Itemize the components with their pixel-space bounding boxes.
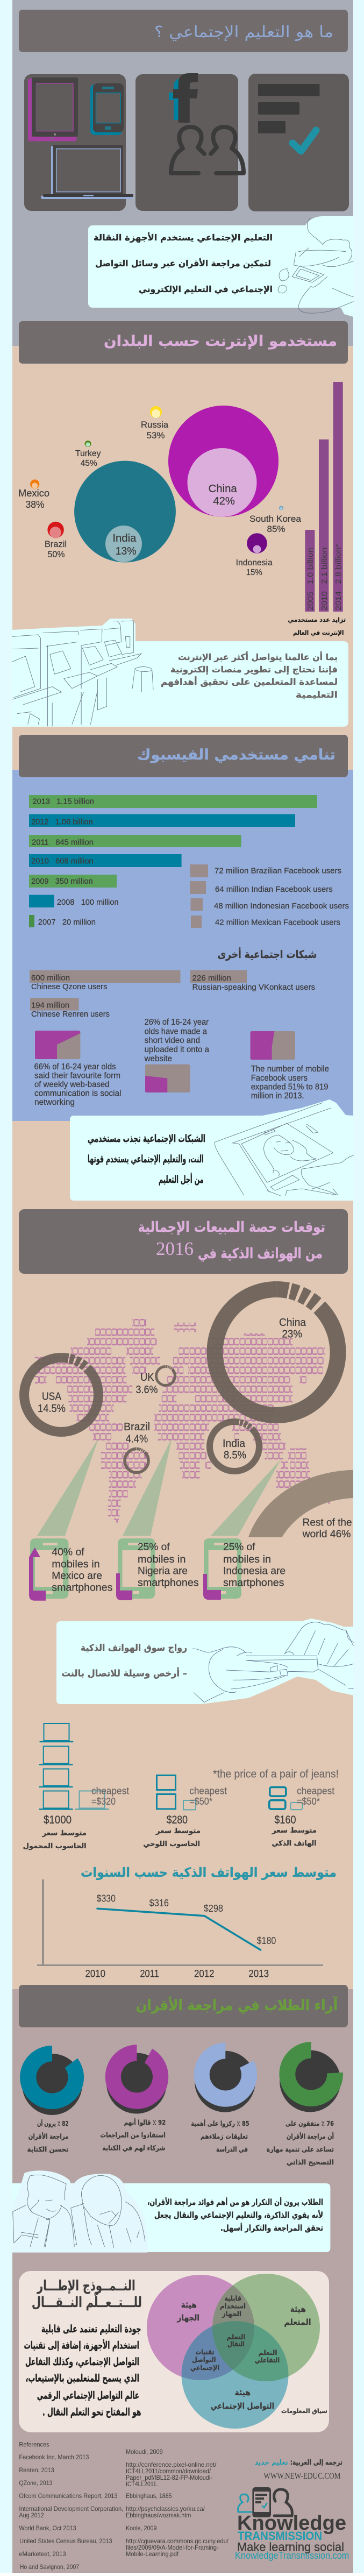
heading: smartphone sales forecast: [19, 1209, 348, 1274]
heading: what is social learning: [19, 10, 348, 52]
illustration: tablet video: [215, 1103, 353, 1196]
chart: laptop price: cheapest: [91, 1786, 129, 1797]
venn labels: الإجتماعي: [190, 2364, 219, 2372]
icon: two people: [171, 127, 244, 173]
chart: price line: 2013: [248, 1969, 269, 1980]
beams: country pointers: [37, 1438, 281, 1536]
text: references column two: Mobile-Learning.pdf: [126, 2550, 179, 2558]
logo: Knowledge Transmission: Knowledge: [237, 2512, 346, 2535]
chart: internet users bubbles: [18, 406, 302, 577]
bubble: Mexico: 38%: [26, 499, 44, 510]
chart: tablet price: $280: [167, 1814, 188, 1826]
callout: smartphone market: [56, 1619, 353, 1704]
text: references column two: http://cguevara.commons.gc.cuny.edu/: [126, 2537, 229, 2545]
venn labels: قابلية: [225, 2294, 241, 2302]
bubble: Turkey: [75, 441, 101, 468]
heading: facebook growth: [19, 735, 348, 777]
heading: smartphone sales forecast: من الهواتف الذكية في: [198, 1246, 323, 1262]
chart: other networks bars: Russian-speaking VKonkact users: [192, 983, 315, 992]
stat: 66 percent social networking: of weekly web-based: [34, 1080, 110, 1089]
icon: smartphone: [90, 83, 124, 135]
illustration: student writing: [278, 218, 353, 313]
venn labels: التعلم: [226, 2333, 245, 2341]
text: framework description: استخدام الأجهزة، إضافة إلى تقنيات: [24, 2339, 139, 2351]
bubble: Brazil: 50%: [47, 550, 65, 559]
chart: facebook users per year: 2008 100 million: [57, 898, 119, 907]
callout text: [94, 232, 273, 295]
callout: repetition benefit: [12, 2170, 330, 2253]
venn labels: سياق المعلومات: [281, 2407, 327, 2415]
callout text: لأنه يقوي الذاكرة، والتعليم الإجتماعي والنقال يجعل: [154, 2210, 323, 2220]
heading: students views on peer review: آراء الطلاب في مراجعة الأقران: [136, 1996, 338, 2014]
chart: price line: 2012: [194, 1969, 214, 1980]
icon: check mark: [292, 130, 316, 151]
bubble: Turkey: Turkey: [75, 449, 101, 458]
heading: framework title: للـــتــعــلّم النــقـــال: [32, 2291, 142, 2311]
stat: 26 percent short video: website: [144, 1054, 172, 1063]
chart: facebook users per year: 2010 608 million: [31, 856, 94, 865]
bubble: South Korea: [249, 506, 302, 534]
bubble: Russia: Russia: [141, 420, 169, 430]
text: references column two: Paper_pdf/IBL12-82-FP-Moloudi-: [126, 2474, 212, 2481]
chart: tablet price: متوسط سعر: [155, 1827, 201, 1835]
text: references column two: Moloudi, 2009: [126, 2448, 163, 2456]
venn labels: المتعلم: [284, 2317, 311, 2327]
bubble: China: 42%: [213, 495, 235, 507]
callout text: التعليم الإجتماعي يستخدم الأجهزة النقالة: [94, 232, 273, 243]
callout text: بما أن عالمنا يتواصل أكثر عبر الإنترنت: [178, 651, 338, 662]
phone stat: Nigeria: 25% of: [138, 1542, 170, 1553]
venn labels: استخدام: [220, 2302, 246, 2311]
ring: USA: [24, 1358, 98, 1432]
bubble: China: [168, 406, 279, 517]
chart: tablet price: الحاسوب اللوحي: [143, 1840, 200, 1848]
callout text: النت، والتعليم الإجتماعي يستخدم قوتها: [88, 1153, 204, 1165]
donut: 76 percent: تساعد على تنمية مهارة: [267, 2145, 334, 2153]
callout: online world: [12, 619, 348, 727]
donut: 85 percent: 85 ٪ ركزوا على أهمية: [191, 2119, 249, 2127]
donut: 76 percent: التصحيح الذاتي: [287, 2158, 334, 2166]
callout text: – أرخص وسيلة للاتصال بالنت: [61, 1667, 187, 1679]
donut: 82 percent: تحسن الكتابة: [27, 2145, 68, 2153]
phone stat: Nigeria: [116, 1538, 199, 1600]
chart: smartphone price: الهاتف الذكي: [272, 1840, 316, 1848]
donut: 85 percent: [191, 2042, 257, 2153]
ring: USA: USA: [42, 1391, 62, 1403]
donut: 82 percent: [20, 2046, 84, 2153]
donut: 76 percent: 76 ٪ متفقون على: [286, 2119, 334, 2127]
heading: students views on peer review: [19, 1985, 348, 2027]
venn labels: الجهاز: [222, 2310, 241, 2318]
text: references column two: files/2009/09/A-Model-for-Framing-: [126, 2544, 219, 2551]
text: framework description: [24, 2323, 141, 2418]
panel: social network card: [135, 73, 244, 211]
ring: China: 23%: [282, 1329, 302, 1340]
text: references column one: Facebook Inc, March 2013: [19, 2453, 89, 2461]
caption: growth of internet users: تزايد عدد مستخدمي: [288, 616, 346, 623]
heading: other social networks: شبكات اجتماعية أخرى: [218, 947, 317, 961]
chart: facebook users per country: 42 million Mexican Facebook users: [215, 918, 340, 927]
text: references column one: [19, 2440, 123, 2571]
bubble: Russia: 53%: [146, 430, 165, 441]
logo: Knowledge Transmission: Make learning social: [237, 2540, 344, 2554]
ring: rest of the world: Rest of the: [303, 1517, 352, 1529]
callout: social networks attract users: [70, 1099, 353, 1201]
illustration: computer stations: [12, 621, 153, 726]
donut: 92 percent: [100, 2045, 168, 2152]
icon: facebook f: [169, 73, 198, 123]
chart: smartphone price: [269, 1786, 334, 1848]
bubble: Brazil: [45, 522, 67, 559]
donut: 92 percent: 92 ٪ قالوا أنهم: [124, 2118, 166, 2126]
chart: price line: [37, 1879, 323, 1980]
ring: India: 8.5%: [224, 1450, 246, 1461]
ring: Brazil: [124, 1421, 150, 1473]
bubble: Indonesia: [236, 533, 273, 577]
phone stat: Nigeria: mobiles in: [138, 1554, 185, 1565]
venn diagram: [147, 2274, 327, 2429]
venn labels: الجهاز: [177, 2313, 199, 2323]
phone stat: Mexico: Mexico are: [52, 1571, 102, 1582]
chart: other networks bars: [30, 970, 315, 1019]
callout text: تحقق المراجعة والتكرار أسهل.: [220, 2223, 323, 2233]
chart: world internet users bars: 2005 1.0 billion: [306, 548, 315, 611]
text: references column two: [126, 2448, 229, 2558]
chart: world internet users bars: 2014 2.8 billion*: [334, 544, 343, 611]
ring: Brazil: Brazil: [124, 1421, 150, 1433]
chart: price line: 2011: [140, 1969, 159, 1980]
stat: mobile facebook users: million in 2013.: [251, 1091, 304, 1101]
ring: China: [215, 1289, 338, 1415]
chart: facebook users per year: 2009 350 million: [31, 877, 93, 886]
text: framework description: جودة التعليم تعتمد على قابلية: [41, 2323, 141, 2335]
callout text: [147, 2197, 323, 2233]
chart: facebook users per year: 2013 1.15 billion: [32, 797, 94, 806]
chart: laptop price: الحاسوب المحمول: [23, 1842, 87, 1850]
ring: India: [210, 1422, 259, 1471]
venn labels: التواصل: [192, 2355, 216, 2364]
callout text: فإننا نحتاج إلى تطوير منصات إلكترونية: [170, 664, 338, 675]
chart: tablet price: cheapest: [189, 1786, 227, 1797]
donut: 82 percent: 82 ٪ يرون أن: [37, 2119, 68, 2127]
heading: what is social learning: ما هو التعليم الإجتماعي ؟: [154, 23, 333, 41]
donut: 76 percent: أن مراجعة الأقران: [287, 2132, 334, 2140]
chart: smartphone price: $160: [274, 1814, 296, 1826]
ring: UK: 3.6%: [135, 1384, 158, 1396]
chart: price line: 2010: [85, 1969, 105, 1980]
bubble: India: India: [112, 533, 137, 544]
logo: Knowledge Transmission: [235, 2487, 349, 2561]
text: framework description: عالم التواصل الإجتماعي الرقمي: [37, 2389, 139, 2401]
stat: mobile facebook users: expanded 51% to 819: [251, 1083, 328, 1092]
text: references column one: eMarketeet, 2013: [19, 2550, 66, 2558]
venn labels: التفاعلي: [255, 2356, 280, 2364]
phone stat: Nigeria: smartphones: [138, 1578, 199, 1589]
chart: tablet price: =$50*: [189, 1796, 212, 1807]
callout text: الشبكات الإجتماعية تجذب مستخدمي: [88, 1133, 205, 1145]
chart: laptop price: =$320: [91, 1796, 116, 1807]
ring: rest of the world: [248, 1470, 353, 1540]
chart: other networks bars: 600 million: [31, 974, 70, 982]
donut: 85 percent: في الدراسة: [216, 2145, 248, 2153]
callout text: التعليمية: [296, 690, 338, 700]
venn labels: النقال: [227, 2340, 245, 2348]
chart: price line: $330: [97, 1893, 116, 1904]
phone stat: Indonesia: 25% of: [223, 1542, 255, 1553]
illustration: two students: [13, 2175, 145, 2247]
chart: other networks bars: 226 million: [192, 974, 231, 983]
text: framework description: هو المفتاح نحو التعلم النقال .: [42, 2406, 141, 2418]
ring: UK: UK: [140, 1372, 154, 1383]
text: references column two: Koole, 2009: [126, 2524, 157, 2532]
bubble: Mexico: [18, 479, 49, 510]
callout text: لتمكين مراجعة الأقران عبر وسائل التواصل: [95, 258, 271, 268]
phone stat: Nigeria: Nigeria are: [138, 1566, 188, 1577]
stat: mobile facebook users: [251, 1031, 329, 1101]
credit: Arabic translation: [255, 2459, 342, 2481]
stat: 66 percent social networking: said their favourite form: [34, 1071, 120, 1081]
heading: internet users by country: مستخدمو الإنترنت حسب البلدان: [104, 333, 337, 350]
text: references column two: http://conference.pixel-online.net/: [126, 2461, 217, 2468]
bubble: China: China: [209, 483, 238, 495]
stat: 66 percent social networking: [34, 1031, 122, 1107]
icon: laptop: [41, 145, 133, 199]
heading: smartphone sales forecast: 2016: [156, 1238, 194, 1259]
text: references column one: World Bank, Oct 2013: [19, 2524, 76, 2532]
chart: smartphone price: =$50*: [297, 1796, 320, 1807]
chart: smartphone price: cheapest: [297, 1786, 334, 1797]
text: references column one: Aug 2012: [19, 2511, 44, 2519]
text: references column two: Ebbinghaus/wozniak.htm: [126, 2511, 191, 2519]
text: references column one: References: [19, 2440, 49, 2448]
donut: 76 percent: [267, 2042, 343, 2166]
callout text: الإجتماعي في التعليم الإلكتروني: [139, 284, 273, 295]
chart: facebook users per year: 2011 845 million: [32, 838, 94, 847]
ring: India: India: [223, 1438, 246, 1450]
text: framework description: الذي يسمح للمتعلمين بالإستيعاب،: [26, 2373, 139, 2385]
text: references column one: United States Census Bureau, 2013: [19, 2537, 112, 2545]
callout text: [61, 1643, 187, 1679]
chart: world internet users bars: [305, 382, 343, 612]
bubble: India: 13%: [116, 545, 137, 557]
heading: average smartphone price: متوسط سعر الهواتف الذكية حسب السنوات: [81, 1865, 337, 1880]
chart: price line: $298: [204, 1903, 223, 1914]
bubble: India: [74, 461, 176, 562]
panel: review card: [248, 74, 349, 211]
chart: laptop price: $1000: [44, 1814, 72, 1826]
phone stat: Mexico: smartphones: [52, 1582, 112, 1594]
text: references column one: International Development Corporation,: [19, 2505, 123, 2513]
chart: other networks bars: Chinese Renren users: [31, 1010, 110, 1019]
illustration: hands with phone: [192, 1622, 353, 1702]
stat: 66 percent social networking: networking: [34, 1098, 75, 1107]
chart: facebook users per country: 64 million Indian Facebook users: [215, 885, 333, 894]
bubble: Mexico: Mexico: [18, 488, 49, 499]
venn labels: تقنيات: [196, 2348, 214, 2356]
venn labels: هيئة: [234, 2388, 251, 2397]
logo: Knowledge Transmission: TRANSMISSION: [238, 2529, 322, 2543]
chart: facebook users per year: [29, 795, 317, 927]
credit: Arabic translation: ترجمه إلى العربية:: [290, 2459, 342, 2467]
ring: USA: 14.5%: [38, 1403, 66, 1415]
callout text: من أجل التعليم: [159, 1173, 204, 1186]
chart: facebook users per country: 48 million Indonesian Facebook users: [214, 902, 349, 911]
venn labels: [177, 2294, 327, 2415]
chart: other networks bars: Chinese Qzone users: [31, 982, 108, 991]
caption: growth of internet users: [288, 616, 346, 636]
phone stat: Indonesia: Indonesia are: [223, 1566, 286, 1577]
phone stat: Indonesia: smartphones: [223, 1578, 284, 1589]
icons: laptops: [44, 1723, 69, 1808]
stat: 66 percent social networking: communication is social: [34, 1089, 122, 1098]
stat: mobile facebook users: The number of mobile: [251, 1065, 329, 1074]
text: references column one: QZone, 2013: [19, 2479, 53, 2487]
chart: other networks bars: 194 million: [31, 1001, 69, 1010]
venn labels: التواصل الإجتماعي: [211, 2401, 274, 2411]
stat: 66 percent social networking: 66% of 16-24 year olds: [34, 1062, 116, 1071]
caption: growth of internet users: الإنترنت في العالم: [293, 629, 344, 636]
text: references column two: http://psychclassics.yorku.ca/: [126, 2505, 205, 2513]
credit: Arabic translation: تعليم جديد: [255, 2459, 288, 2467]
donut: 92 percent: شركاء لهم في الكتابة: [102, 2144, 165, 2152]
map: world of phone glyphs: [35, 1318, 332, 1522]
chart: price line: $180: [257, 1935, 276, 1946]
heading: internet users by country: [19, 321, 348, 364]
bubble: Indonesia: Indonesia: [236, 558, 273, 567]
text: framework description: التواصل الإجتماعي، وكذلك التفاعل: [25, 2356, 139, 2368]
callout: social learning definition: [88, 216, 353, 317]
callout text: رواج سوق الهواتف الذكية: [81, 1643, 187, 1654]
panel: devices card: [24, 74, 133, 211]
text: references column one: Renren, 2013: [19, 2466, 54, 2474]
chart: tablet price: [143, 1775, 227, 1848]
callout text: [161, 651, 338, 700]
bubble: Russia: [141, 406, 169, 441]
donut: 85 percent: تعليقات زملاءهم: [201, 2132, 248, 2140]
phone stat: Indonesia: mobiles in: [223, 1554, 271, 1565]
ring: China: China: [279, 1317, 306, 1329]
donut: 82 percent: مراجعة الأقران: [28, 2132, 68, 2140]
stat: mobile facebook users: Facebook users: [251, 1074, 308, 1083]
bubble: Brazil: Brazil: [45, 540, 67, 549]
text: references column two: Ebbinghaus, 1885: [126, 2492, 172, 2500]
stat: 26 percent short video: [144, 1018, 209, 1092]
venn labels: التعلم: [259, 2348, 277, 2357]
venn labels: هيئة: [181, 2300, 197, 2310]
chart: facebook users per year: 2007 20 million: [38, 918, 96, 927]
chart: facebook users per country: 72 million Brazilian Facebook users: [215, 867, 341, 876]
heading: framework title: النــمــوذج الإطـــار: [37, 2278, 135, 2294]
chart: facebook users per year: 2012 1.06 billion: [31, 818, 93, 826]
heading: facebook growth: تنامي مستخدمي الفيسبوك: [137, 747, 336, 763]
phone stat: Mexico: mobiles in: [52, 1559, 100, 1570]
bubble: South Korea: South Korea: [249, 514, 302, 524]
chart: world internet users bars: 2010 2.1 billion: [320, 547, 329, 611]
callout text: لمساعدة المتعلمين على تحقيق أهدافهم: [161, 676, 338, 687]
phone stat: Indonesia: [203, 1538, 286, 1600]
heading: framework title: [32, 2278, 142, 2311]
credit: Arabic translation: WWW.NEW-EDUC.COM: [263, 2472, 340, 2481]
text: references column two: ICT4LL2011/common/download/: [126, 2467, 211, 2475]
icon: text lines: [258, 84, 319, 133]
logo: Knowledge Transmission: KnowledgeTransmission.com: [235, 2550, 349, 2561]
chart: smartphone price: متوسط سعر: [272, 1827, 317, 1835]
bubble: South Korea: 85%: [267, 524, 286, 534]
chart: facebook users per country: [190, 864, 349, 928]
heading: smartphone sales forecast: توقعات حصة المبيعات الإجمالية: [138, 1219, 325, 1236]
stat: 26 percent short video: short video and: [145, 1036, 200, 1045]
bubble: Turkey: 45%: [81, 459, 97, 468]
venn labels: هيئة: [290, 2304, 306, 2314]
icon: tablet: [28, 77, 78, 141]
donut: 92 percent: استفادوا من المراجعات: [100, 2131, 166, 2139]
text: references column one: Ho and Savignon, 2007: [20, 2563, 79, 2571]
chart: laptop price: متوسط سعر: [42, 1829, 87, 1837]
chart: price line: $316: [149, 1898, 169, 1908]
phone stat: Mexico: [29, 1538, 112, 1601]
note: price of jeans: *the price of a pair of jeans!: [213, 1768, 339, 1780]
phone stat: Mexico: 40% of: [52, 1547, 84, 1558]
chart: laptop price: [23, 1723, 129, 1850]
ring: UK: [135, 1366, 175, 1396]
icons: smartphones: [269, 1787, 286, 1809]
stat: 26 percent short video: 26% of 16-24 year: [145, 1018, 209, 1027]
ring: Brazil: 4.4%: [126, 1434, 148, 1445]
bubble: Indonesia: 15%: [246, 568, 262, 577]
ring: rest of the world: world 46%: [302, 1529, 351, 1540]
text: references column one: Ofcom Communications Report, 2013: [19, 2492, 118, 2500]
stat: 26 percent short video: uploaded it onto a: [145, 1045, 209, 1054]
callout text: [88, 1133, 205, 1186]
icons: tablets: [157, 1775, 175, 1809]
panel: mobile learning framework: [19, 2271, 329, 2432]
text: references column two: ICT4LL2011.: [126, 2480, 158, 2488]
stat: 26 percent short video: olds have made a: [145, 1027, 207, 1036]
